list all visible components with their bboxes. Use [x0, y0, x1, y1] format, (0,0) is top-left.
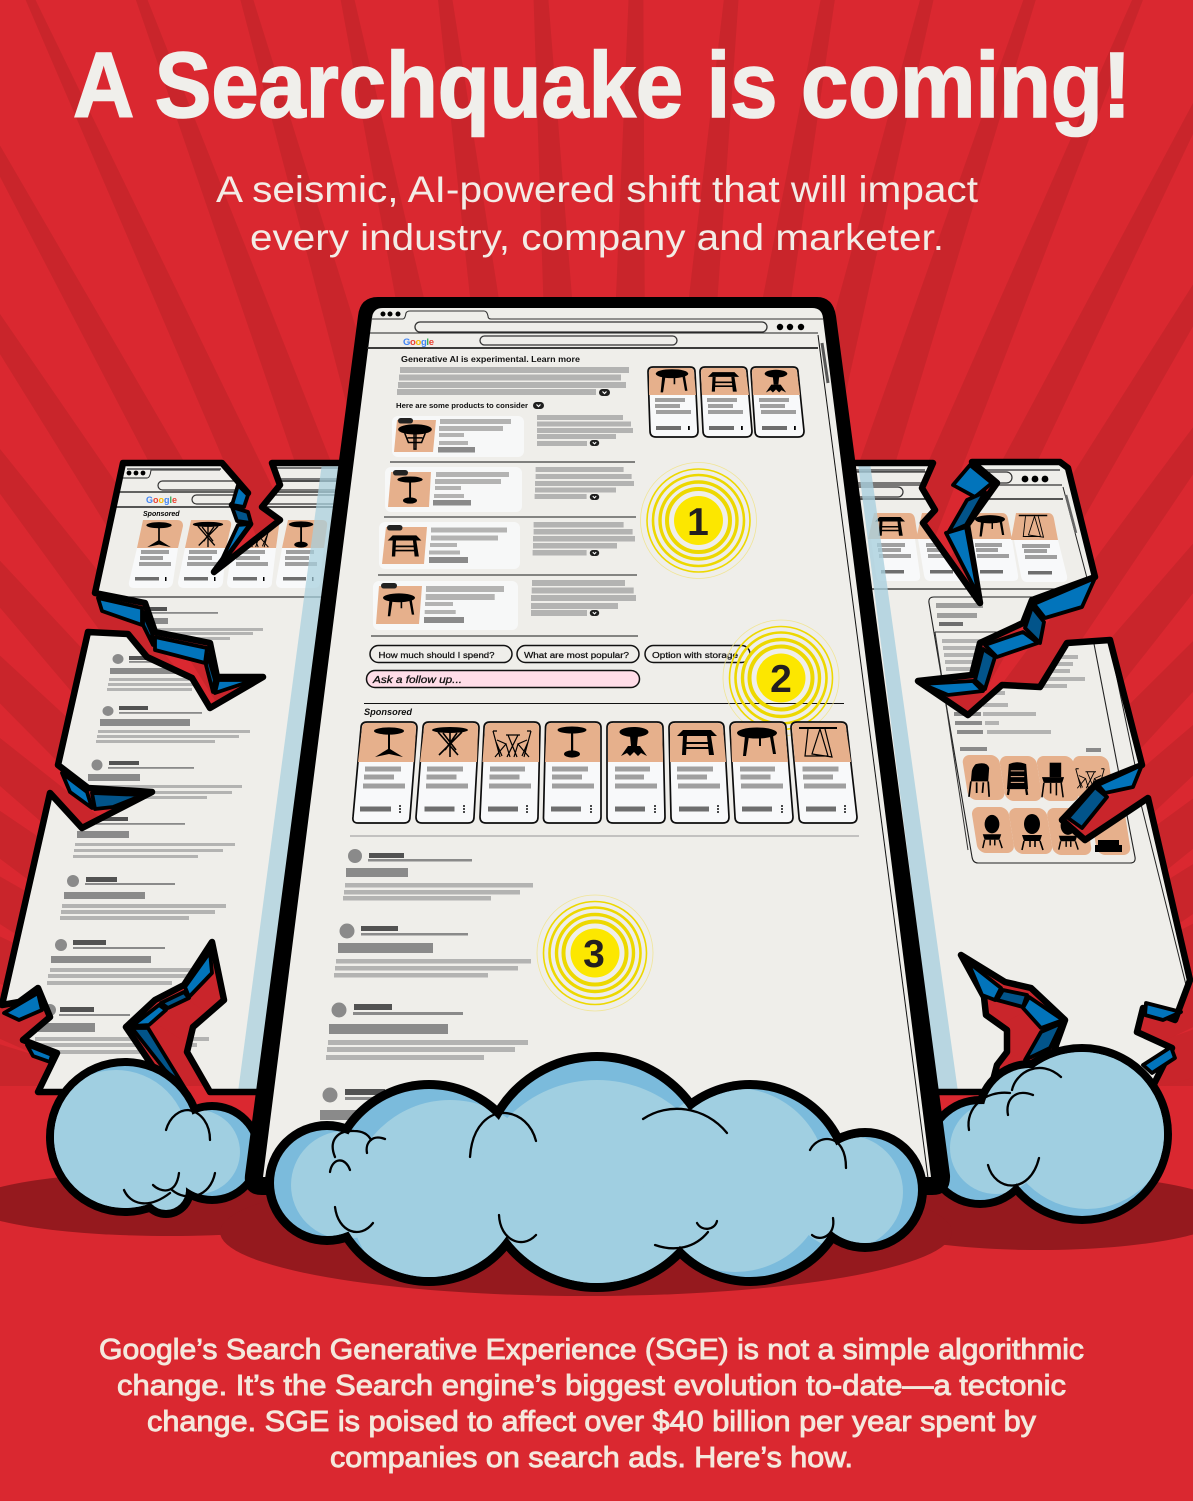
- footer paragraph: [99, 1334, 1084, 1474]
- panel: main browser: [245, 297, 950, 1195]
- right browser paper: [840, 462, 1190, 1092]
- left browser content: Google: [146, 495, 177, 505]
- target 2: 2: [770, 658, 792, 701]
- follow-up chips: Option with storage: [652, 650, 738, 660]
- follow-up input: [366, 670, 640, 688]
- AI summary lines: [397, 367, 629, 396]
- cloud: left: [44, 1058, 263, 1218]
- panel: left browser: [0, 460, 340, 1096]
- follow-up chips: How much should I spend?: [378, 650, 495, 660]
- cloud: main: [265, 1052, 927, 1292]
- crack shards left: [4, 485, 254, 1090]
- search result 1: [343, 849, 533, 900]
- search result 2: [334, 924, 531, 978]
- top product cards: [648, 367, 804, 437]
- left browser outline: [2, 463, 345, 1092]
- search result 4: [320, 1088, 425, 1120]
- main browser paper: [263, 308, 931, 1177]
- subtitle: every industry, company and marketer.: [250, 217, 944, 258]
- footer paragraph: companies on search ads. Here’s how.: [330, 1442, 853, 1474]
- target 1: [640, 462, 756, 578]
- AI overview heading: Generative AI is experimental. Learn more: [401, 354, 580, 364]
- follow-up chips: [370, 646, 750, 662]
- subtitle: A seismic, AI-powered shift that will impact: [216, 169, 979, 210]
- follow-up chips: What are most popular?: [524, 650, 629, 660]
- left browser content: [35, 466, 338, 1089]
- footer paragraph: change. SGE is poised to affect over $40 billion per year spent by: [147, 1406, 1037, 1438]
- follow-up input: Ask a follow up...: [372, 674, 462, 686]
- target 3: 3: [583, 933, 605, 976]
- ground shadows: [0, 1168, 1193, 1296]
- product row 1: [392, 415, 633, 457]
- sponsored label: Sponsored: [364, 707, 413, 717]
- left browser content: Sponsored: [143, 511, 180, 518]
- right browser outline: [840, 462, 1190, 1092]
- main browser frame: [245, 297, 950, 1195]
- subtitle: [216, 169, 979, 258]
- footer paragraph: Google’s Search Generative Experience (SGE) is not a simple algorithmic: [99, 1334, 1084, 1366]
- target 3: [537, 895, 653, 1011]
- sponsored product cards: [353, 722, 857, 823]
- right browser content: [845, 463, 1186, 1092]
- footer paragraph: change. It’s the Search engine’s biggest evolution to-date—a tectonic: [117, 1370, 1066, 1402]
- product row 2: [385, 467, 634, 512]
- products heading: Here are some products to consider: [396, 401, 528, 410]
- browser chrome: [367, 311, 928, 1178]
- left browser paper: [2, 463, 345, 1092]
- browser chrome: Google: [403, 337, 434, 348]
- product row 3: [379, 522, 635, 569]
- search result 3: [326, 1002, 528, 1060]
- panel: right browser: [840, 462, 1190, 1092]
- product row 4: [373, 580, 636, 630]
- target 2: [723, 620, 839, 736]
- crack shards right: [922, 465, 1181, 1073]
- target 1: 1: [687, 501, 709, 544]
- cloud: right: [924, 1043, 1172, 1224]
